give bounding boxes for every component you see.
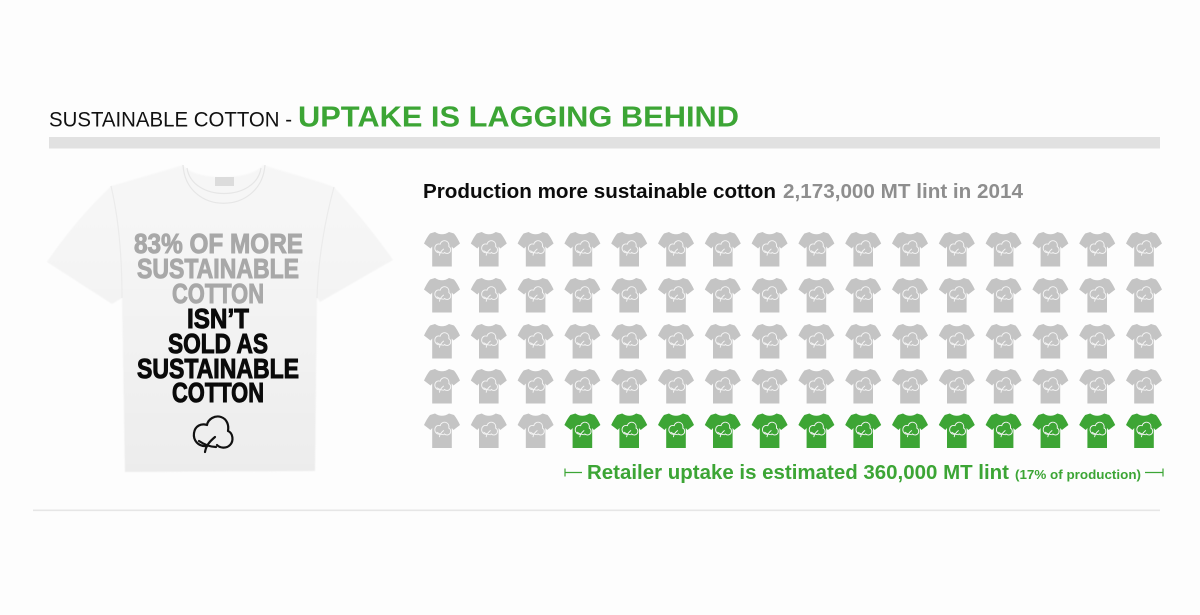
row 1 of grey t-shirts [424,232,1162,266]
shirt message: black lines: COTTON [172,377,264,408]
shirt message: black lines: SOLD AS [168,328,268,359]
shirt message: black lines [137,303,299,408]
shirt message: grey lines: COTTON [172,278,264,309]
title: UPTAKE IS LAGGING BEHIND [298,102,739,134]
production heading: 2,173,000 MT lint in 2014 [783,181,1024,203]
right bracket arrow [1145,468,1163,476]
shirt message: grey lines [134,228,303,309]
row 5 green t-shirts [564,414,1162,448]
production heading [423,181,1024,203]
title [49,102,739,134]
shirt message: grey lines: SUSTAINABLE [137,253,299,284]
callout percentage note: (17% of production) [1015,468,1141,482]
shirt message: black lines: ISN’T [187,303,249,334]
t-shirt pictogram chart [424,232,1162,448]
row 5 grey t-shirts [424,414,554,448]
row 3 of grey t-shirts [424,324,1162,358]
left bracket arrow [565,468,582,476]
title: SUSTAINABLE COTTON - [49,108,292,132]
sleeve seams [111,186,334,298]
production heading: Production more sustainable cotton [423,181,776,203]
callout text: Retailer uptake is estimated 360,000 MT lint [587,462,1009,484]
neck label [215,177,234,186]
shirt message: black lines: SUSTAINABLE [137,353,299,384]
collar [183,165,265,203]
large t-shirt panel [47,165,393,472]
icon: cotton boll [194,416,232,452]
t-shirt shape [47,165,393,472]
retailer uptake callout [565,462,1163,484]
bottom rule [33,510,1160,511]
title underline bar [49,137,1160,148]
shirt message: grey lines: 83% OF MORE [134,228,303,259]
row 2 of grey t-shirts [424,278,1162,312]
row 4 of grey t-shirts [424,369,1162,404]
